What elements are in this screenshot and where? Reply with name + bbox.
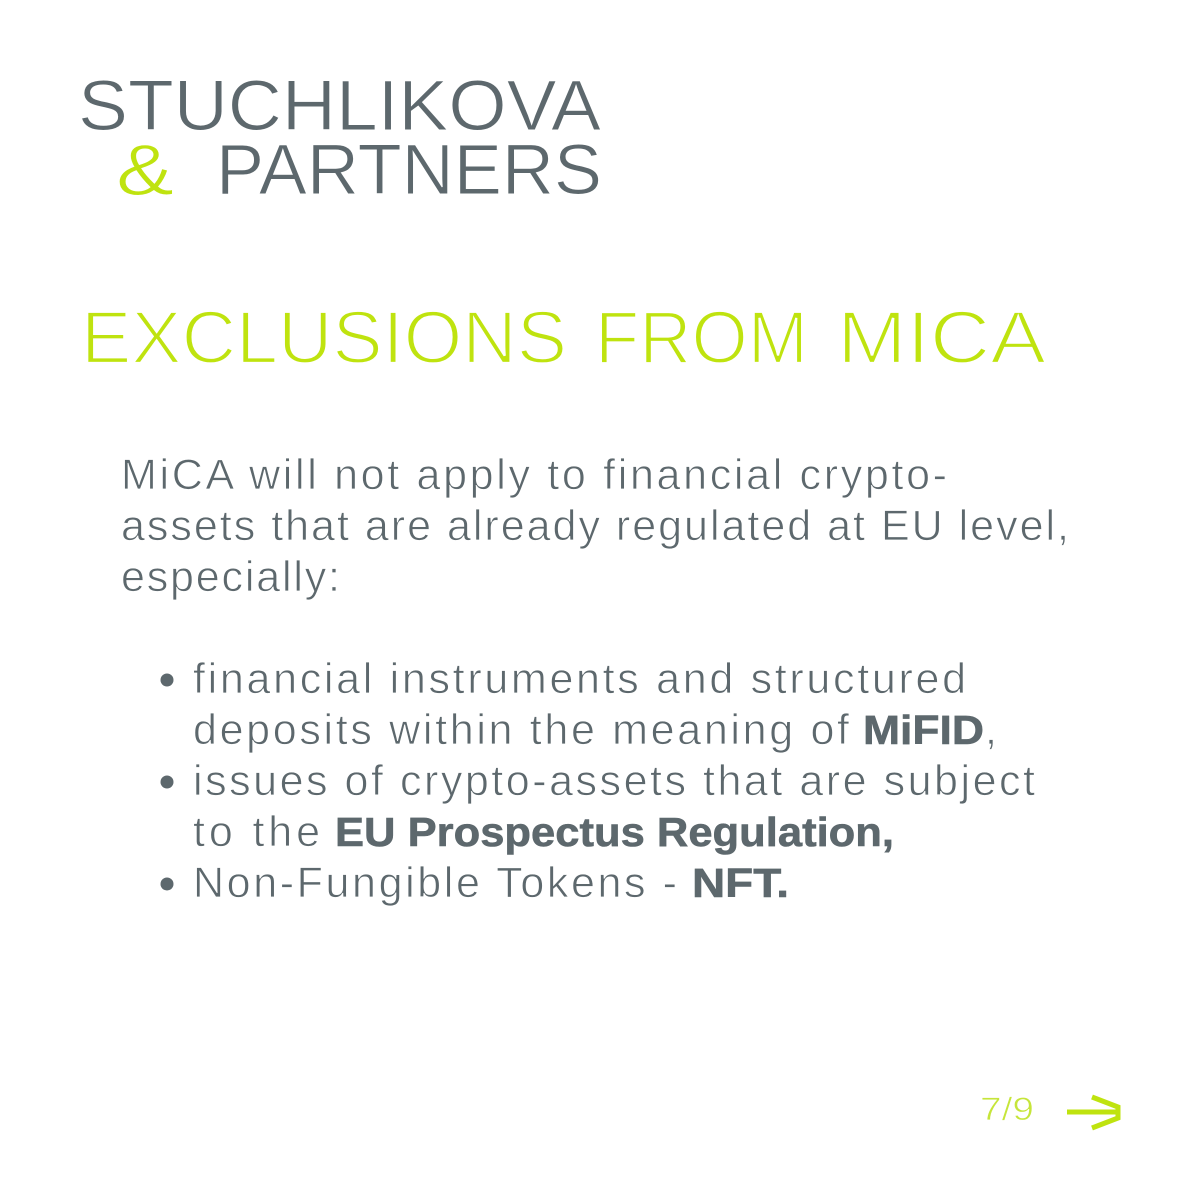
bullet: financial instruments: deposits within the meaning of — [193, 706, 850, 754]
bullet: EU Prospectus Regulation: EU Prospectus Regulation, — [335, 809, 894, 855]
logo ampersand: & — [116, 131, 174, 211]
page number: 7/9 — [980, 1091, 1034, 1127]
icon: next arrow — [1067, 1097, 1118, 1128]
bullet: NFT: NFT. — [692, 860, 789, 906]
bullet: financial instruments — [160, 655, 997, 754]
bullet: EU Prospectus Regulation: to the — [193, 808, 320, 856]
title: MICA — [837, 296, 1047, 379]
intro text block: especially: — [121, 553, 340, 601]
title — [81, 296, 1047, 379]
bullet: financial instruments: , — [985, 706, 997, 754]
bullet list — [160, 655, 1035, 907]
intro text block: MiCA will not apply to financial crypto- — [121, 451, 947, 499]
bullet: EU Prospectus Regulation: issues of crypto-assets that are subject — [193, 757, 1035, 805]
bullet: EU Prospectus Regulation — [160, 757, 1035, 856]
bullet: financial instruments: financial instruments and structured — [193, 655, 966, 703]
intro text block: assets that are already regulated at EU level, — [121, 502, 1069, 550]
logo — [78, 67, 602, 211]
intro text block — [121, 451, 1069, 601]
bullet: NFT: Non-Fungible Tokens - — [193, 859, 677, 907]
logo word: Partners: PARTNERS — [216, 131, 602, 210]
logo word: Stuchlikova: STUCHLIKOVA — [78, 67, 602, 146]
bullet: financial instruments: MiFID — [863, 707, 984, 753]
title: FROM — [595, 296, 808, 379]
title: EXCLUSIONS — [81, 296, 567, 379]
